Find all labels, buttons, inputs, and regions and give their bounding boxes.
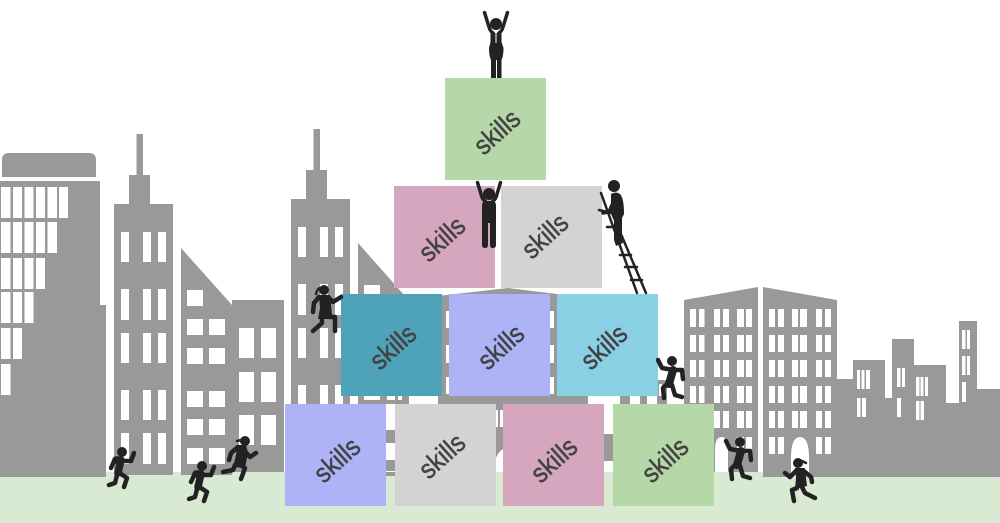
block: grey bottom row: skills (413, 427, 471, 485)
building: right apartment left wing (684, 287, 758, 472)
figure: girl running at right (785, 458, 815, 501)
block: top green: skills (468, 103, 526, 161)
block: green bottom row: skills (636, 431, 694, 489)
block: grey second row: skills (516, 207, 574, 265)
skyline (0, 129, 1000, 477)
block: grey bottom row (395, 404, 496, 506)
block: teal third row (341, 294, 442, 396)
building: right apartment right wing (763, 287, 837, 477)
ground (0, 472, 1000, 523)
figure: runner far left (109, 447, 134, 487)
block: sky blue third row (557, 294, 658, 396)
figure: runner right of blocks (658, 356, 683, 398)
figure and ladder: man climbing (599, 180, 646, 293)
block: top green (445, 78, 546, 180)
block: grey second row (501, 186, 602, 288)
figure: runner by arch (726, 437, 751, 479)
block: pink bottom row (503, 404, 604, 506)
figure: woman with raised arms on top (484, 12, 508, 78)
figure: runner second left (189, 461, 214, 501)
block: sky blue third row: skills (575, 318, 633, 376)
building: spire tower left (114, 134, 173, 475)
building: central behind blocks (386, 288, 667, 476)
building: spire tower centre (291, 129, 350, 475)
building: far right low skyline (837, 321, 1000, 477)
building: stepped tower with rounded cap (0, 153, 106, 477)
building: wedge roof behind blocks (358, 243, 409, 476)
block: periwinkle third row (449, 294, 550, 396)
block: periwinkle bottom row (285, 404, 386, 506)
block: green bottom row (613, 404, 714, 506)
block: teal third row: skills (364, 318, 422, 376)
block: periwinkle bottom row: skills (308, 431, 366, 489)
figure: man with raised arms holding up block (478, 182, 500, 248)
figure: girl running left (223, 436, 256, 479)
building: low block (232, 300, 284, 472)
block: pink second row (394, 186, 495, 288)
block: pink second row: skills (413, 210, 471, 268)
building: wedge roof block (181, 248, 232, 475)
block: periwinkle third row: skills (472, 318, 530, 376)
block: pink bottom row: skills (525, 431, 583, 489)
figure: girl climbing left (313, 285, 341, 331)
